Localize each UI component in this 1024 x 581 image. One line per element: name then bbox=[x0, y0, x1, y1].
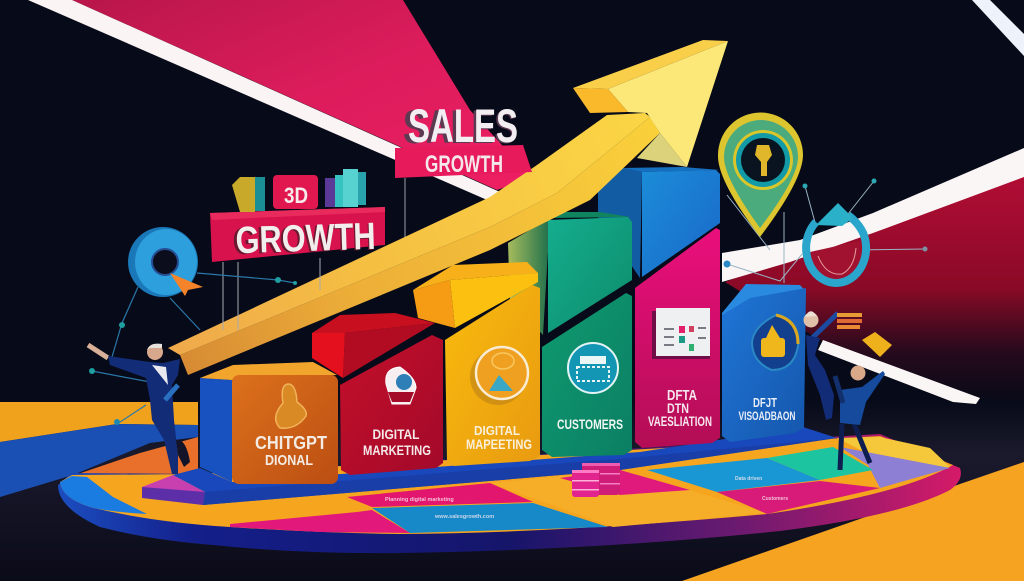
icon: digital marketing cup bbox=[386, 367, 416, 404]
cap top bbox=[530, 212, 630, 218]
hand bbox=[88, 345, 108, 358]
head bbox=[850, 366, 866, 380]
heading: GROWTH: GROWTH bbox=[232, 217, 375, 263]
left arm bbox=[835, 376, 843, 403]
pink banner bbox=[395, 145, 532, 178]
dashboard screen bbox=[652, 308, 710, 359]
bar 2: red block bbox=[312, 313, 443, 475]
bar 4: green block bbox=[508, 212, 632, 457]
inner red rings bbox=[810, 240, 864, 282]
connector lines bbox=[92, 273, 295, 424]
blue side bbox=[200, 378, 232, 482]
pink board bbox=[210, 207, 385, 262]
sign: 3D growth: GROWTH bbox=[235, 216, 376, 262]
icon: data gauge ring bbox=[724, 178, 928, 283]
lavender floor panel bbox=[840, 447, 950, 488]
back leg bbox=[176, 440, 190, 467]
label: CUSTOMERS bbox=[557, 416, 623, 432]
bar 2: red block: MARKETING bbox=[363, 442, 431, 458]
head bbox=[804, 312, 818, 328]
top edge of board bbox=[210, 207, 385, 220]
posts bbox=[223, 258, 320, 330]
blue-teal floor panel bbox=[372, 503, 608, 533]
legs bbox=[840, 424, 870, 470]
sign: 3D growth: 3D bbox=[284, 183, 308, 208]
white light stripe, right bbox=[722, 148, 1024, 282]
bar 1: orange block: DIONAL bbox=[265, 452, 313, 469]
white light stripe, upper left bbox=[28, 0, 500, 203]
top face bbox=[722, 284, 806, 322]
pink floor panel bbox=[347, 483, 533, 507]
shirt bbox=[152, 365, 168, 385]
icon: briefcase badge bbox=[752, 315, 798, 370]
jacket bbox=[840, 371, 885, 425]
dark red wedge, right bbox=[725, 172, 1024, 400]
blue cap front bbox=[642, 170, 720, 277]
gold box bbox=[862, 332, 892, 357]
yellow floor panel bbox=[490, 470, 767, 527]
yellow floor panel, far right bbox=[837, 437, 950, 470]
pink wedge bbox=[72, 0, 532, 190]
cap top bbox=[312, 313, 435, 333]
blue cap side bbox=[598, 168, 642, 278]
floor blue panel, left bbox=[0, 424, 198, 497]
floor panel captions: Data driven bbox=[735, 476, 762, 482]
cap side bbox=[508, 218, 550, 335]
figures bbox=[232, 177, 255, 212]
magenta front bbox=[635, 228, 720, 448]
head fold bbox=[573, 88, 628, 113]
circular platform bbox=[58, 427, 961, 553]
head underside bbox=[637, 133, 687, 167]
cap front bbox=[450, 273, 538, 328]
teal floor panel bbox=[767, 447, 873, 480]
blue surface panel, left bbox=[60, 476, 147, 514]
front face bbox=[722, 288, 806, 442]
front face bbox=[542, 293, 632, 457]
white light stripe, lower right bbox=[818, 340, 980, 404]
icon: location pin bbox=[718, 112, 803, 283]
platform rim bbox=[58, 434, 961, 553]
icon: round badge bbox=[470, 347, 528, 405]
magenta floor panel, right bbox=[717, 481, 880, 514]
icon: blue target ring with arrow bbox=[89, 227, 297, 425]
icon: calendar badge bbox=[568, 343, 618, 393]
bar 1: orange block bbox=[200, 362, 338, 484]
floor panel captions: Customers bbox=[762, 496, 788, 502]
person: man at left bbox=[88, 344, 190, 474]
sleeve bbox=[165, 385, 178, 400]
ring bbox=[806, 215, 866, 283]
cap side bbox=[413, 280, 455, 328]
label: DIGITAL bbox=[474, 423, 520, 438]
icon: padlock bbox=[276, 384, 306, 428]
sign: sales growth: SALES bbox=[408, 99, 518, 152]
floor panel captions: www.salesgrowth.com bbox=[434, 514, 494, 520]
person: man right with box bbox=[835, 332, 892, 470]
front face bbox=[232, 375, 338, 484]
magenta floor panel bbox=[230, 510, 410, 533]
mini bars bbox=[325, 178, 335, 207]
ring bbox=[128, 227, 198, 297]
subheading: GROWTH: GROWTH bbox=[425, 151, 503, 178]
bar 6: blue block: VISOADBAON bbox=[738, 409, 796, 423]
blue cap top bbox=[623, 167, 720, 172]
bar 5: magenta block with blue cap bbox=[598, 167, 720, 448]
floor panel captions bbox=[385, 476, 788, 520]
label: DIGITAL bbox=[372, 426, 420, 442]
3D tag bbox=[273, 175, 318, 209]
head face bbox=[608, 41, 728, 167]
shaft top bbox=[168, 113, 650, 355]
bar 5: magenta block with blue cap: VAESLIATION bbox=[648, 413, 712, 429]
top face bbox=[200, 362, 337, 380]
body bbox=[806, 335, 834, 420]
bar 3: yellow block bbox=[413, 262, 540, 466]
sign: sales growth bbox=[395, 99, 532, 237]
purple corner of ledge bbox=[142, 475, 205, 498]
label: CHITGPT bbox=[255, 433, 327, 453]
arm bbox=[810, 313, 838, 340]
posts bbox=[404, 178, 406, 237]
pink floor panel, center bbox=[560, 470, 690, 495]
front face bbox=[340, 335, 443, 475]
bar 3: yellow block: MAPEETING bbox=[466, 436, 532, 452]
person: jumping man right bbox=[804, 311, 862, 420]
body and legs bbox=[108, 356, 180, 474]
heading: SALES: SALES bbox=[403, 100, 517, 153]
label: DFJT bbox=[753, 395, 777, 410]
floor yellow panel, bottom right bbox=[682, 462, 1024, 581]
bar 5: magenta block with blue cap: DTN bbox=[667, 400, 689, 416]
white light stripe, top right corner bbox=[972, 0, 1024, 56]
dark floor bbox=[0, 400, 1024, 581]
label: DFTA bbox=[667, 387, 697, 404]
shaft side bbox=[180, 117, 660, 375]
head top edge bbox=[573, 40, 728, 89]
blue floor panel, right bbox=[647, 458, 820, 492]
bar 6: blue block bbox=[722, 284, 806, 442]
yellow papers bbox=[837, 313, 862, 317]
sign: 3D growth bbox=[210, 169, 385, 330]
floor panel captions: Planning digital marketing bbox=[385, 497, 454, 503]
floor yellow panel, left bbox=[0, 402, 198, 442]
floor orange panel, left bbox=[72, 437, 198, 476]
connector lines bbox=[727, 181, 925, 281]
front face bbox=[445, 285, 540, 466]
dart bbox=[170, 273, 203, 296]
cap side bbox=[312, 333, 345, 378]
pink coin stack bbox=[572, 463, 620, 497]
platform surface base bbox=[60, 436, 953, 534]
cap front bbox=[548, 217, 632, 333]
head bbox=[147, 344, 163, 360]
cap front bbox=[343, 323, 435, 378]
connector lines bbox=[727, 195, 784, 283]
growth arrow bbox=[168, 40, 728, 375]
cap top bbox=[413, 262, 538, 290]
blue base ledge bbox=[173, 427, 837, 505]
